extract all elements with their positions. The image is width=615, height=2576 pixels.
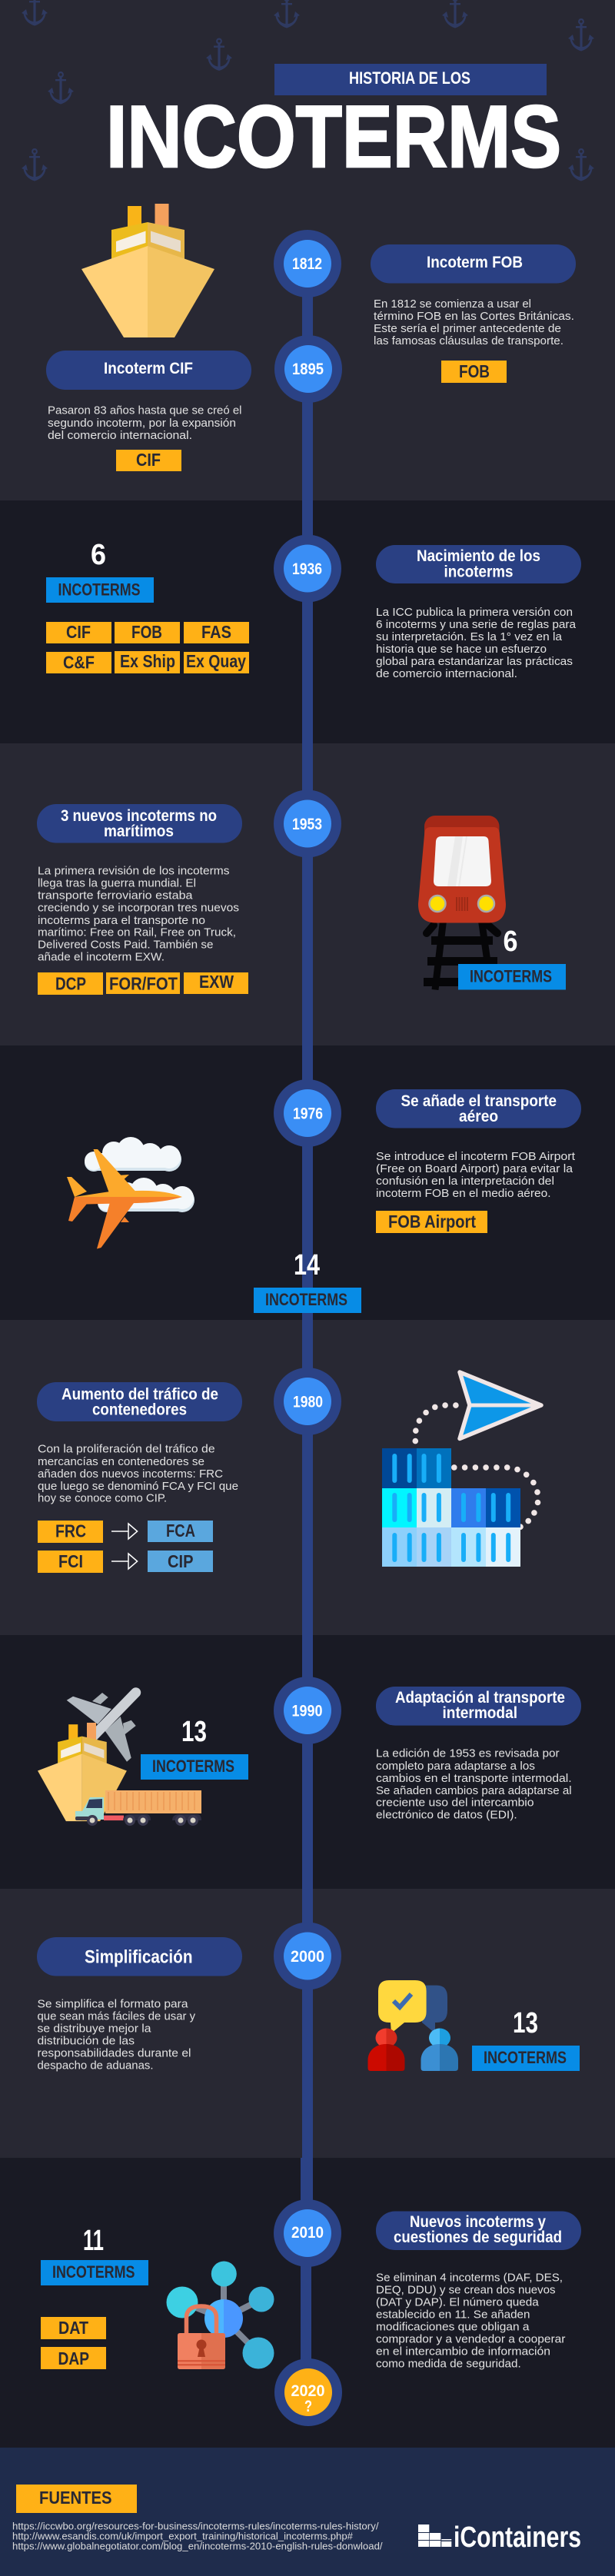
count: 13 incoterms, 1990: INCOTERMS [152, 1757, 234, 1776]
text: 2010: DEQ, DDU) y se crean dos nuevos [376, 2283, 556, 2296]
text: 2000 [37, 1998, 196, 2072]
tag: FOB Airport: FOB Airport [388, 1212, 476, 1231]
tag: FOB: FOB [459, 361, 490, 381]
text: 1936: historia que se hace un esfuerzo [376, 643, 547, 656]
text: 1812: Este sería el primer antecedente de [374, 322, 561, 335]
text: 2000: distribución de las [37, 2034, 135, 2047]
tag: FUENTES [16, 2485, 137, 2513]
year marker 2010: 2010 [291, 2224, 324, 2242]
text: 2010 [376, 2271, 565, 2371]
tags: FRC FCI to FCA CIP: FCI [58, 1551, 83, 1571]
text: 1936: de comercio internacional. [376, 667, 517, 680]
text: 1990: creciente uso del intercambio [376, 1797, 534, 1810]
tag: CIF [116, 450, 181, 471]
text: 2010: en el intercambio de información [376, 2345, 550, 2358]
icon: containers and paper plane [382, 1372, 541, 1567]
text: 1953 [38, 864, 239, 964]
text: 1976: (Free on Board Airport) para evitar la [376, 1162, 573, 1175]
count: 6 incoterms, train: 6 [503, 926, 518, 958]
tags: 1936 terms: Ex Ship [120, 651, 175, 671]
count: 6 incoterms, train: INCOTERMS [470, 967, 552, 986]
text: 2000: responsabilidades durante el [37, 2046, 191, 2059]
year marker 1953: 1953 [292, 816, 322, 833]
tag: FUENTES: FUENTES [39, 2488, 112, 2508]
year marker 2010 [274, 2199, 341, 2267]
text: 2010: modificaciones que obligan a [376, 2321, 530, 2334]
year marker 1812 [274, 230, 341, 297]
subtitle band [274, 64, 547, 95]
tags: 1936 terms [46, 622, 249, 673]
text: 1953: creciendo y se incorporan tres nuevos [38, 902, 239, 915]
text: 1895 [48, 404, 241, 442]
text: 1980: mercancías en contenedores se [38, 1455, 204, 1468]
icon: ship [81, 204, 214, 337]
pill: Incoterm CIF [46, 351, 251, 390]
text: 2010: comprador y a vendedor a cooperar [376, 2332, 565, 2345]
anchor pattern [22, 0, 594, 181]
text: 1936 [376, 606, 577, 680]
count: 14 incoterms: INCOTERMS [265, 1290, 347, 1309]
tags: 1953 terms: DCP [55, 973, 86, 993]
text: 1976: incoterm FOB en el medio aéreo. [376, 1187, 550, 1200]
text: 1980: Con la proliferación del tráfico de [38, 1443, 215, 1456]
pill: seguridad: cuestiones de seguridad [394, 2229, 562, 2246]
sources list: http://www.esandis.com/uk/import_export_training/historical_incoterms.php# [12, 2531, 354, 2541]
text: 2010: establecido en 11. Se añaden [376, 2308, 530, 2322]
text: 1990: cambios en el transporte intermodal. [376, 1772, 572, 1785]
pill: Incoterm CIF: Incoterm CIF [104, 360, 193, 377]
text: 1953: Delivered Costs Paid. También se [38, 938, 214, 952]
year marker 1976 [274, 1079, 341, 1147]
year marker 1980 [274, 1368, 341, 1435]
pill: seguridad: Nuevos incoterms y [410, 2213, 546, 2231]
count: 13 incoterms, 2000: 13 [513, 2007, 538, 2039]
text: 2000: Se simplifica el formato para [37, 1998, 188, 2011]
pill: 3 nuevos incoterms: marítimos [104, 823, 174, 840]
tags: 1936 terms: FAS [201, 622, 231, 642]
pill: Nacimiento: Nacimiento de los [417, 547, 540, 565]
count: 13 incoterms, 2000: INCOTERMS [484, 2048, 567, 2067]
text: 1953: incoterms para el transporte no [38, 914, 205, 927]
count: 13 incoterms, 1990 [141, 1716, 248, 1780]
subtitle band: HISTORIA DE LOS [349, 68, 470, 88]
year marker 2020 [274, 2358, 342, 2426]
text: 1990: electrónico de datos (EDI). [376, 1809, 517, 1822]
year marker 1953 [274, 790, 341, 858]
text: 1990: Se añaden cambios para adaptarse al [376, 1784, 572, 1797]
pill: Nacimiento [376, 545, 581, 583]
icon: train [418, 816, 506, 990]
tag: CIF: CIF [136, 450, 161, 470]
text: 1936: su interpretación. Es la 1° vez en la [376, 630, 563, 643]
year marker 1895 [274, 335, 342, 403]
text: 1953: La primera revisión de los incoterms [38, 864, 229, 878]
text: 1980 [38, 1443, 238, 1505]
year marker 1895: 1895 [292, 361, 324, 378]
icon: plane, ship and truck [38, 1693, 201, 1826]
text: 2000: despacho de aduanas. [37, 2059, 154, 2072]
tags: 1953 terms [38, 972, 248, 995]
tags: FRC FCI to FCA CIP: CIP [168, 1551, 194, 1571]
text: 2010: como medida de seguridad. [376, 2358, 521, 2371]
pill: 3 nuevos incoterms [37, 804, 242, 843]
text: 1895: del comercio internacional. [48, 429, 192, 442]
count: 13 incoterms, 1990: 13 [181, 1716, 207, 1748]
tags: 1953 terms: FOR/FOT [109, 973, 178, 993]
year marker 2020: 2020 [291, 2382, 324, 2400]
pill: 3 nuevos incoterms: 3 nuevos incoterms no [61, 807, 217, 825]
text: 2010: Se eliminan 4 incoterms (DAF, DES, [376, 2271, 563, 2284]
icon: network and padlock [166, 2262, 274, 2369]
text: 1936: La ICC publica la primera versión con [376, 606, 573, 619]
pill: contenedores: Aumento del tráfico de [62, 1385, 218, 1404]
text: 2000: que sean más fáciles de usar y [37, 2010, 196, 2023]
text: 1953: añade el incoterm EXW. [38, 951, 165, 964]
sources list: https://iccwbo.org/resources-for-business/incoterms-rules/incoterms-rules-history/ [12, 2520, 379, 2531]
text: 2010: (DAT y DAP). El número queda [376, 2295, 539, 2309]
year marker 2020: ? [304, 2398, 312, 2415]
count: 6 incoterms [46, 539, 154, 603]
tags: 1936 terms: Ex Quay [186, 651, 246, 671]
tags: 1936 terms: CIF [66, 622, 91, 642]
tags: 1953 terms: EXW [199, 972, 234, 992]
sources list: https://www.globalnegotiator.com/blog_en/incoterms-2010-english-rules-donwload/ [12, 2540, 383, 2552]
year marker 1980: 1980 [293, 1393, 323, 1411]
year marker 2000 [274, 1922, 341, 1989]
footer background [0, 2448, 615, 2576]
count: 6 incoterms: INCOTERMS [58, 580, 140, 600]
tags: FRC FCI to FCA CIP: FRC [55, 1521, 86, 1541]
text: 2000: se distribuye mejor la [37, 2023, 151, 2036]
count: 11 incoterms: 11 [83, 2225, 104, 2257]
pill: Nacimiento: incoterms [444, 563, 514, 581]
icon: people with speech bubbles [367, 1980, 458, 2071]
text: 1990: completo para adaptarse a los [376, 1760, 535, 1773]
year marker 1936: 1936 [292, 560, 322, 578]
text: 1990: La edición de 1953 es revisada por [376, 1747, 560, 1760]
pill: Simplificacion [37, 1937, 242, 1976]
count: 6 incoterms, train [458, 926, 566, 990]
tags: FRC FCI to FCA CIP [38, 1521, 213, 1573]
tags: DAT DAP [41, 2317, 106, 2369]
text: 1980: añaden dos nuevos incoterms: FRC [38, 1467, 223, 1481]
pill: contenedores: contenedores [92, 1401, 187, 1419]
year marker 1990: 1990 [292, 1702, 323, 1720]
count: 11 incoterms: INCOTERMS [52, 2262, 135, 2282]
year marker 1976: 1976 [293, 1105, 323, 1122]
year marker 1990 [274, 1677, 341, 1744]
sources list [12, 2520, 383, 2552]
pill: Incoterm FOB [371, 244, 576, 283]
count: 6 incoterms: 6 [91, 539, 106, 571]
pill: intermodal: Adaptación al transporte [395, 1689, 565, 1707]
tag: FOB [441, 361, 507, 383]
text: 1990 [376, 1747, 572, 1822]
tags: DAT DAP: DAP [58, 2348, 89, 2368]
text: 1812 [374, 297, 574, 347]
count: 13 incoterms, 2000 [472, 2007, 580, 2071]
logo: iContainers: iContainers [454, 2521, 581, 2554]
pill: seguridad [376, 2211, 581, 2250]
tags: 1936 terms: FOB [131, 622, 162, 642]
text: 1980: que luego se denominó FCA y FCI que [38, 1480, 238, 1493]
text: 1812: término FOB en las Cortes Británicas. [374, 310, 574, 323]
pill: intermodal [376, 1687, 581, 1726]
pill: transporte aereo [376, 1089, 581, 1128]
icon: airplane and clouds [67, 1137, 194, 1248]
year marker 1812: 1812 [292, 255, 322, 273]
text: 1895: segundo incoterm, por la expansión [48, 417, 236, 430]
text: 1980: hoy se conoce como CIP. [38, 1492, 167, 1505]
year marker 2000: 2000 [291, 1948, 324, 1966]
text: 1953: llega tras la guerra mundial. El [38, 877, 196, 890]
text: 1976: confusión en la interpretación del [376, 1175, 554, 1188]
text: 1895: Pasaron 83 años hasta que se creó el [48, 404, 241, 417]
timeline spine [301, 264, 313, 2392]
pill: contenedores [37, 1382, 242, 1421]
tags: DAT DAP: DAT [58, 2318, 88, 2338]
tags: 1936 terms: C&F [63, 652, 95, 672]
text: 1936: global para estandarizar las prácticas [376, 655, 573, 668]
text: 1812: En 1812 se comienza a usar el [374, 297, 531, 311]
logo: iContainers [418, 2521, 581, 2554]
pill: Simplificacion: Simplificación [85, 1947, 192, 1968]
pill: Incoterm FOB: Incoterm FOB [427, 254, 523, 271]
pill: intermodal: intermodal [443, 1704, 517, 1722]
text: 1976: Se introduce el incoterm FOB Airport [376, 1150, 576, 1163]
text: 1953: marítimo: Free on Rail, Free on Truck, [38, 926, 236, 939]
tags: FRC FCI to FCA CIP: FCA [166, 1521, 195, 1541]
text: 1936: 6 incoterms y una serie de reglas para [376, 618, 577, 631]
year marker 1936 [274, 535, 341, 603]
text: 1953: transporte ferroviario estaba [38, 889, 193, 902]
count: 11 incoterms [41, 2225, 148, 2285]
pill: transporte aereo: Se añade el transporte [401, 1092, 557, 1110]
text: 1812: las famosas cláusulas de transporte. [374, 334, 563, 347]
text: 1976 [376, 1150, 576, 1200]
count: 14 incoterms [254, 1249, 361, 1313]
count: 14 incoterms: 14 [294, 1249, 320, 1281]
pill: transporte aereo: aéreo [459, 1108, 498, 1125]
